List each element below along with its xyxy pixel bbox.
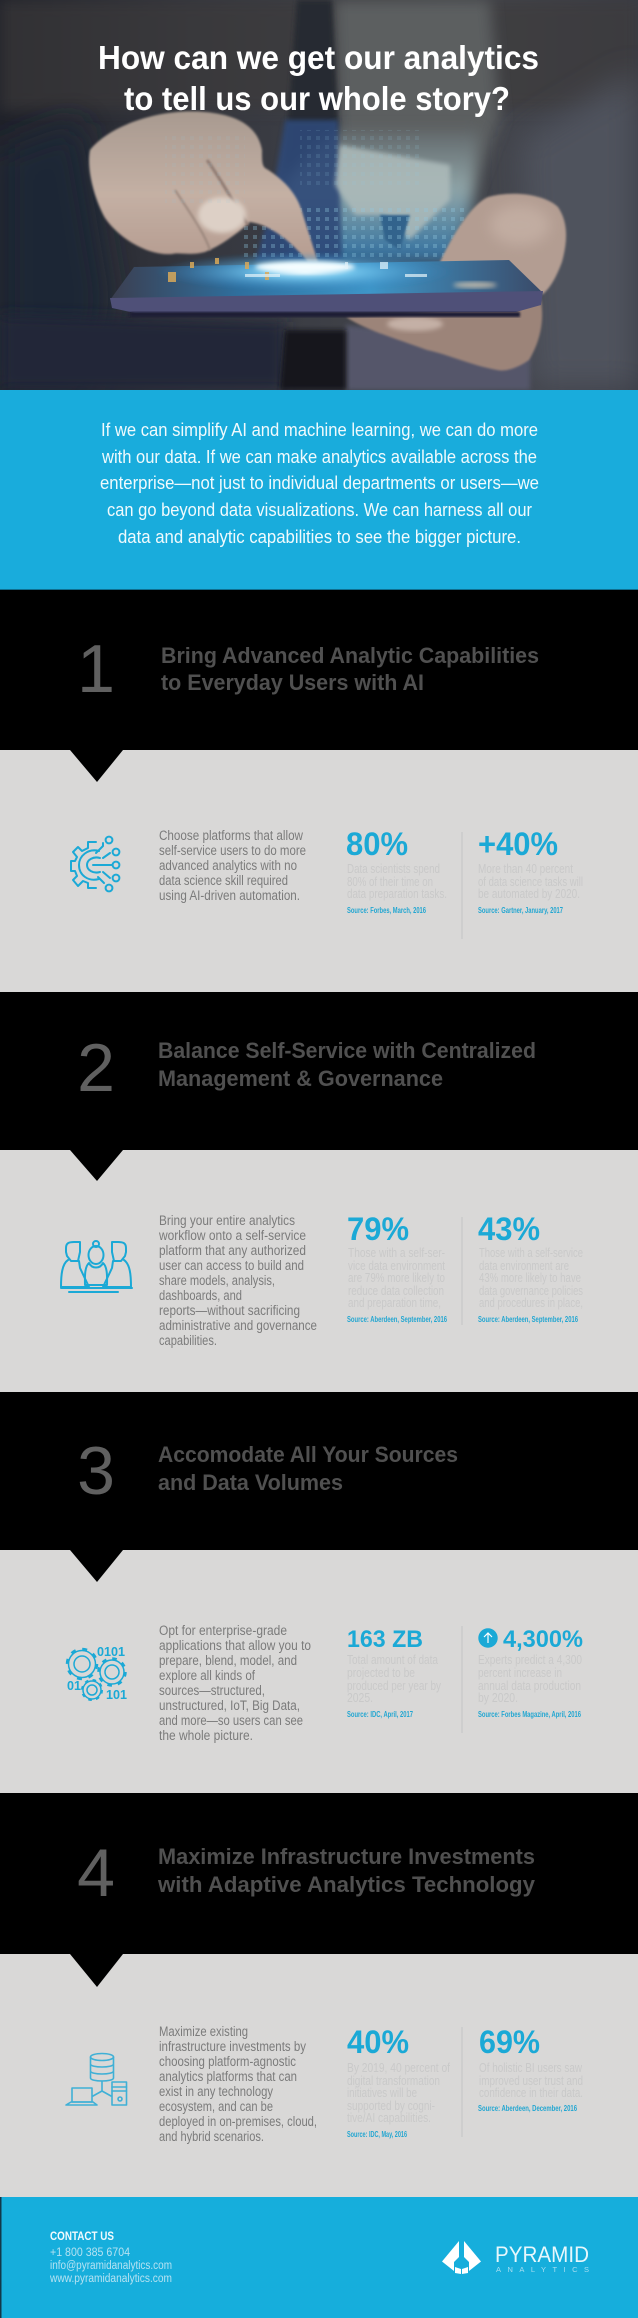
hologram map xyxy=(285,130,480,262)
stat: 43% xyxy=(478,1211,583,1324)
step 3 description: Opt for enterprise-grade xyxy=(159,1623,287,1638)
stat: 4,300% with up arrow: percent increase in xyxy=(478,1666,562,1680)
footer xyxy=(0,2197,638,2318)
icon: gears and binary xyxy=(67,1644,127,1702)
stat: 79% xyxy=(347,1211,447,1324)
stat: 69%: Of holistic BI users saw xyxy=(479,2061,583,2075)
intro text: can go beyond data visualizations. We can harness all our xyxy=(107,500,532,520)
contact details: info@pyramidanalytics.com xyxy=(50,2260,172,2272)
step 1 description xyxy=(159,828,306,903)
step 3 description: applications that allow you to xyxy=(159,1638,311,1653)
step 3 description: the whole picture. xyxy=(159,1728,253,1743)
stat: 69%: improved user trust and xyxy=(479,2074,583,2088)
stat: +40%: be automated by 2020. xyxy=(478,887,580,901)
stat: 163 ZB: produced per year by xyxy=(347,1679,442,1693)
hero title xyxy=(98,39,539,117)
step 3 description: explore all kinds of xyxy=(159,1668,255,1683)
icon: gears and binary: 101 xyxy=(106,1687,127,1702)
panel: step 3 header: 3 xyxy=(77,1433,115,1509)
stat: 80%: Data scientists spend xyxy=(347,862,440,876)
left pointing hand xyxy=(89,111,318,262)
stat: 163 ZB xyxy=(347,1626,442,1719)
icon: gears and binary: 01 xyxy=(67,1678,81,1693)
contact details xyxy=(49,2231,172,2285)
step 1 description: data science skill required xyxy=(159,873,288,888)
stat: 79%: and preparation time, xyxy=(348,1296,441,1310)
step 3 description: unstructured, IoT, Big Data, xyxy=(159,1698,300,1713)
step 4 description xyxy=(159,2024,317,2144)
stat: 43%: data environment are xyxy=(479,1259,569,1273)
step 2 description: user can access to build and xyxy=(159,1258,304,1273)
stat: 79%: 79% xyxy=(347,1211,409,1247)
tablet xyxy=(110,260,543,300)
stat: 43%: Those with a self-service xyxy=(479,1246,583,1260)
stat: 40%: digital transformation xyxy=(347,2074,440,2088)
stat: 4,300% with up arrow: annual data production xyxy=(478,1679,581,1693)
screen glow xyxy=(168,252,426,288)
stat: +40%: Source: Gartner, January, 2017 xyxy=(478,906,563,915)
stat: 163 ZB: 2025. xyxy=(347,1691,373,1705)
panel: step 3 body xyxy=(0,1550,638,1793)
panel: step 4 header: with Adaptive Analytics Technology xyxy=(157,1872,536,1897)
stat: 163 ZB: 163 ZB xyxy=(347,1626,423,1653)
stat: 79%: are 79% more likely to xyxy=(348,1271,445,1285)
logo: Pyramid Analytics xyxy=(442,2241,589,2274)
intro text xyxy=(100,420,539,547)
stat: 69%: confidence in their data. xyxy=(479,2086,583,2100)
right holding hand xyxy=(440,194,566,294)
contact details: CONTACT US xyxy=(50,2231,114,2243)
panel: step 4 header xyxy=(0,1793,638,1954)
panel: step 4 header: 4 xyxy=(77,1835,115,1911)
stat: 163 ZB: projected to be xyxy=(347,1666,415,1680)
intro text: with our data. If we can make analytics available across the xyxy=(101,447,537,467)
stat: 163 ZB: Source: IDC, April, 2017 xyxy=(347,1710,413,1719)
step 2 description: administrative and governance xyxy=(159,1318,317,1333)
stat: 80%: data preparation tasks. xyxy=(347,887,447,901)
contact details: www.pyramidanalytics.com xyxy=(49,2273,172,2285)
panel: step 1 body xyxy=(0,750,638,992)
stat: 4,300% with up arrow: 4,300% xyxy=(503,1626,583,1653)
step 1 description: advanced analytics with no xyxy=(159,858,297,873)
stat: +40%: +40% xyxy=(478,826,558,862)
step 4 description: and hybrid scenarios. xyxy=(159,2129,264,2144)
stat: 163 ZB: Total amount of data xyxy=(347,1653,438,1667)
stat: 40% xyxy=(347,2024,450,2139)
stat: 69%: Source: Aberdeen, December, 2016 xyxy=(478,2104,577,2113)
step 4 description: ecosystem, and can be xyxy=(159,2099,273,2114)
step 2 description: platform that any authorized xyxy=(159,1243,306,1258)
step 2 description: reports—without sacrificing xyxy=(159,1303,300,1318)
step 1 description: using AI-driven automation. xyxy=(159,888,300,903)
contact details: +1 800 385 6704 xyxy=(50,2247,131,2259)
step 1 description: Choose platforms that allow xyxy=(159,828,303,843)
stat: 40%: 40% xyxy=(347,2024,409,2060)
stat: 40%: supported by cogni- xyxy=(347,2099,435,2113)
step 2 description: workflow onto a self-service xyxy=(158,1228,306,1243)
panel: step 4 header: Maximize Infrastructure Investments xyxy=(158,1844,535,1869)
logo: Pyramid Analytics: PYRAMID xyxy=(495,2242,589,2267)
hero title: to tell us our whole story? xyxy=(124,80,510,117)
stat: 79%: vice data environment xyxy=(348,1259,445,1273)
hero title: How can we get our analytics xyxy=(98,39,539,76)
step 4 description: analytics platforms that can xyxy=(159,2069,297,2084)
stat: 80% xyxy=(346,826,447,915)
step 2 description: Bring your entire analytics xyxy=(159,1213,295,1228)
stat: 43%: 43% xyxy=(478,1211,540,1247)
stat: 79%: Source: Aberdeen, September, 2016 xyxy=(347,1315,447,1324)
stat: 79%: reduce data collection xyxy=(348,1284,444,1298)
icon: up arrow circle xyxy=(478,1628,498,1648)
stat: 40%: initiatives will be xyxy=(347,2086,417,2100)
step 3 description: sources—structured, xyxy=(159,1683,265,1698)
panel: step 3 header: and Data Volumes xyxy=(158,1470,343,1495)
stat: 80%: Source: Forbes, March, 2016 xyxy=(347,906,426,915)
step 3 description: and more—so users can see xyxy=(159,1713,303,1728)
step 2 description xyxy=(158,1213,317,1348)
panel: step 2 body xyxy=(0,1150,638,1392)
stat: 4,300% with up arrow: by 2020. xyxy=(478,1691,518,1705)
stat: 4,300% with up arrow: Source: Forbes Magazine, April, 2016 xyxy=(478,1710,581,1719)
step 3 description xyxy=(159,1623,311,1743)
step 3 description: prepare, blend, model, and xyxy=(159,1653,297,1668)
stat: 69%: 69% xyxy=(479,2024,540,2060)
stat: 69% xyxy=(478,2024,583,2113)
panel: step 1 header: 1 xyxy=(77,631,115,707)
panel: step 4 body xyxy=(0,1954,638,2197)
stat: +40%: More than 40 percent xyxy=(478,862,573,876)
panel: step 2 header xyxy=(0,992,638,1150)
intro text: If we can simplify AI and machine learning, we can do more xyxy=(101,420,538,440)
stat: 43%: Source: Aberdeen, September, 2016 xyxy=(478,1315,578,1324)
step 2 description: capabilities. xyxy=(159,1333,217,1348)
logo: Pyramid Analytics: ANALYTICS xyxy=(496,2265,589,2274)
step 4 description: Maximize existing xyxy=(159,2024,248,2039)
stat: +40% xyxy=(478,826,583,915)
stat: 43%: and procedures in place, xyxy=(479,1296,583,1310)
icon: three people at table xyxy=(61,1241,132,1292)
step 4 description: exist in any technology xyxy=(159,2084,273,2099)
intro text: enterprise—not just to individual departments or users—we xyxy=(100,473,539,493)
stat: 79%: Those with a self-ser- xyxy=(348,1246,445,1260)
intro panel xyxy=(0,390,638,590)
panel: step 2 header: Management & Governance xyxy=(158,1066,443,1091)
step 4 description: infrastructure investments by xyxy=(159,2039,306,2054)
panel: step 2 header: 2 xyxy=(77,1030,115,1106)
panel: step 3 header: Accomodate All Your Sources xyxy=(158,1442,458,1467)
panel: step 3 header xyxy=(0,1392,638,1550)
step 2 description: share models, analysis, xyxy=(159,1273,275,1288)
stat: +40%: of data science tasks will xyxy=(478,875,583,889)
hero photo: hands using tablet xyxy=(0,0,638,390)
panel: step 1 header: to Everyday Users with AI xyxy=(161,670,424,695)
stat: 43%: 43% more likely to have xyxy=(479,1271,581,1285)
step 4 description: choosing platform-agnostic xyxy=(159,2054,296,2069)
step 2 description: dashboards, and xyxy=(159,1288,242,1303)
step 1 description: self-service users to do more xyxy=(159,843,306,858)
step 4 description: deployed in on-premises, cloud, xyxy=(159,2114,317,2129)
panel: step 1 header: Bring Advanced Analytic Capabilities xyxy=(161,643,539,668)
stat: 80%: 80% xyxy=(346,826,408,862)
stat: 4,300% with up arrow xyxy=(478,1626,583,1719)
stat: 40%: By 2019, 40 percent of xyxy=(347,2061,450,2075)
stat: 4,300% with up arrow: Experts predict a 4,300 xyxy=(478,1653,582,1667)
stat: 40%: tive/AI capabilities. xyxy=(347,2111,431,2125)
panel: step 1 header xyxy=(0,590,638,750)
panel: step 2 header: Balance Self-Service with Centralized xyxy=(158,1038,536,1063)
icon: database, laptop and server xyxy=(66,2054,126,2105)
icon: gears and binary: 0101 xyxy=(97,1644,125,1659)
stat: 43%: data governance policies xyxy=(479,1284,583,1298)
stat: 40%: Source: IDC, May, 2016 xyxy=(347,2130,407,2139)
stat: 80%: 80% of their time on xyxy=(347,875,433,889)
intro text: data and analytic capabilities to see the bigger picture. xyxy=(118,527,521,547)
icon: AI gear circuit xyxy=(71,837,119,891)
